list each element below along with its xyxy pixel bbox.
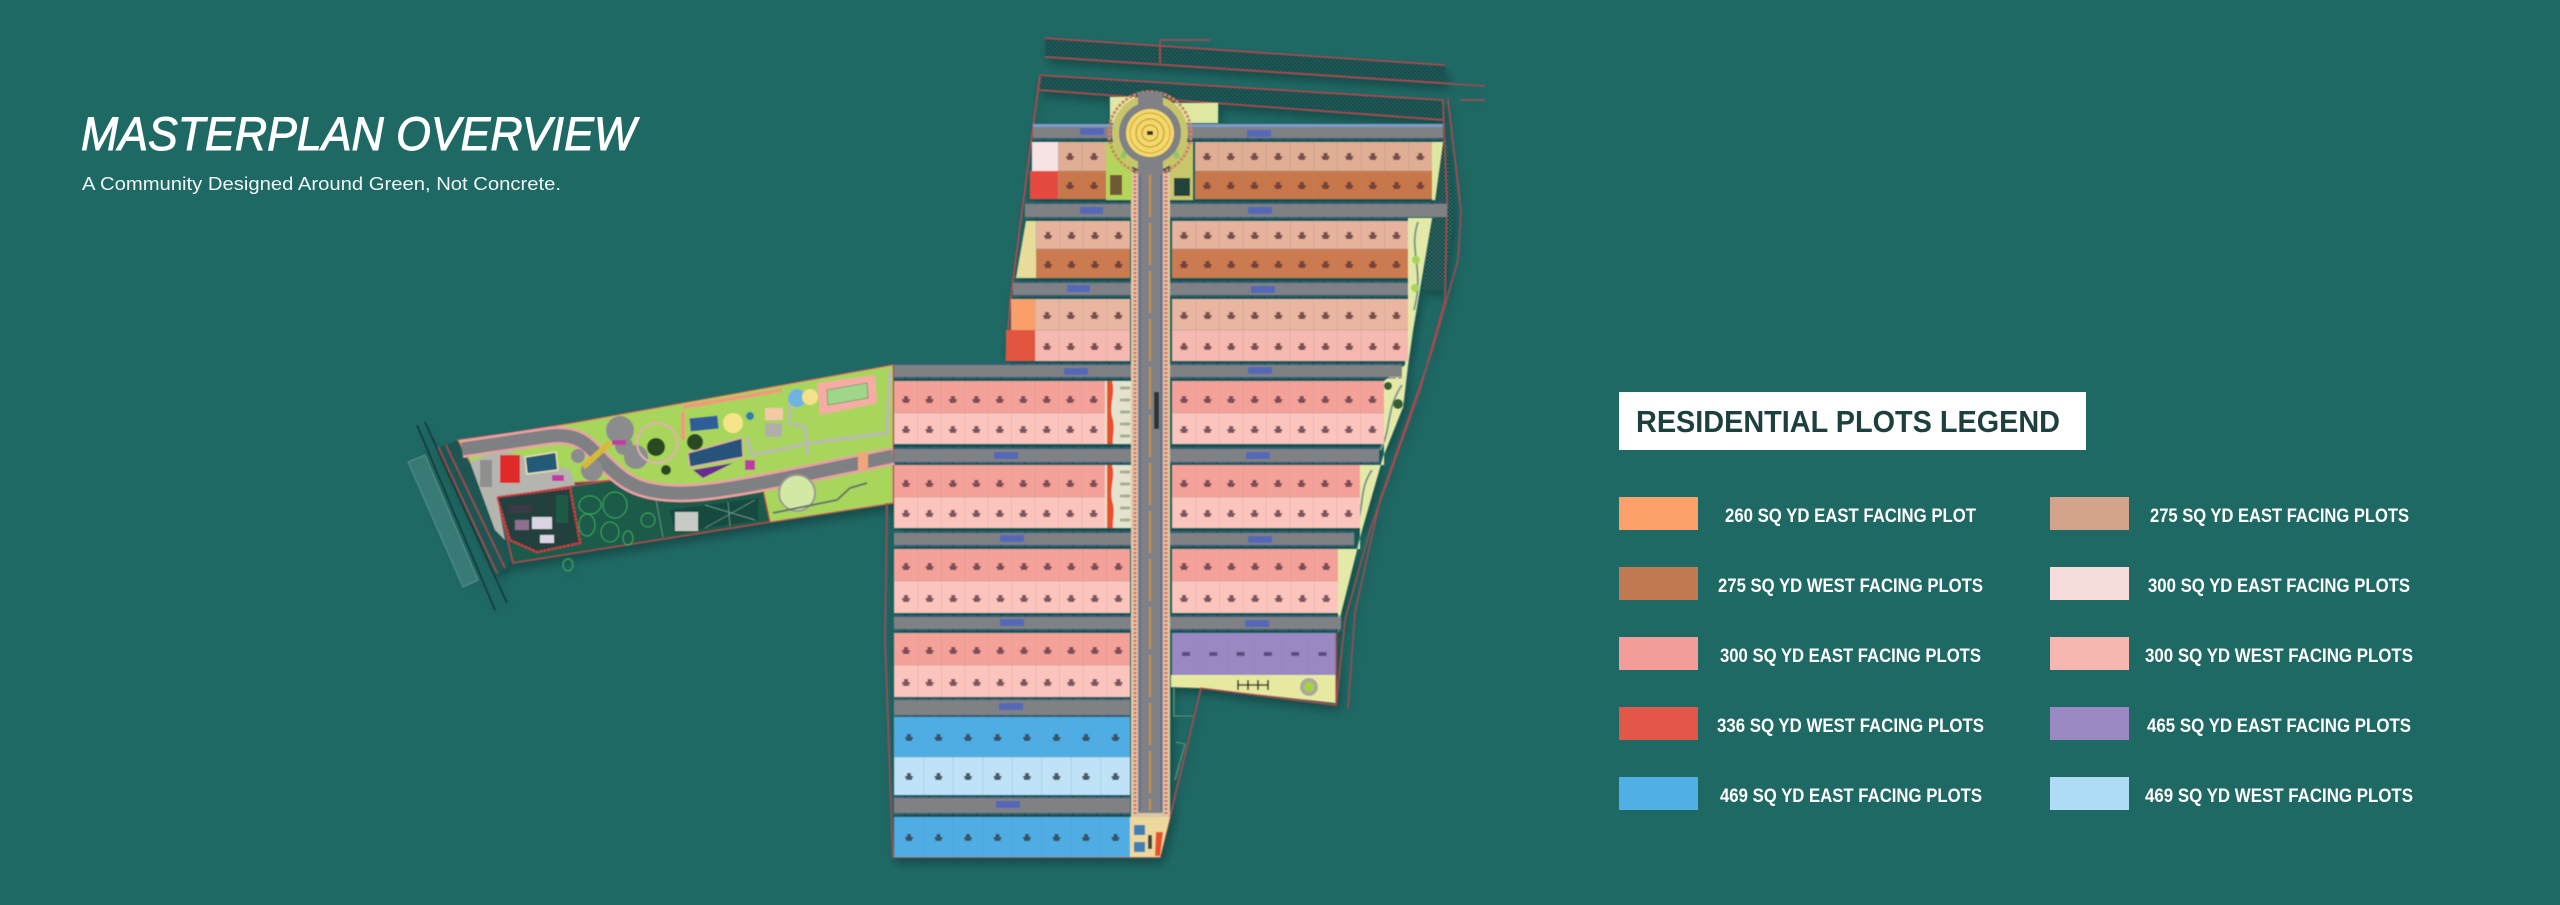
legend item 469 west [2050, 777, 2413, 810]
legend item 260 east [1619, 497, 1976, 530]
avenue blue edge lines [1140, 175, 1161, 810]
west wing faint canal strip [408, 455, 478, 587]
subtitle: A Community Designed Around Green, Not Concrete. [82, 174, 561, 194]
tennis inner [827, 383, 868, 405]
upper walkway [683, 390, 782, 440]
south east boundary [894, 633, 1336, 857]
legend item 300 east [1619, 637, 1981, 670]
legend heading: RESIDENTIAL PLOTS LEGEND [1636, 404, 2060, 439]
legend item 469 east [1619, 777, 1982, 810]
legend heading [1619, 392, 2086, 450]
grey shade blobs [571, 416, 648, 481]
central avenue verges [1131, 172, 1170, 817]
dark green nursery [497, 480, 770, 563]
legend item 300 west: 300 SQ YD WEST FACING PLOTS [2145, 646, 2413, 667]
club building detail [508, 495, 568, 543]
legend item 469 west: 469 SQ YD WEST FACING PLOTS [2145, 786, 2413, 807]
legend item 300 west [2050, 637, 2413, 670]
pink walk along road [462, 435, 893, 493]
plots row D [894, 381, 1384, 444]
title: MASTERPLAN OVERVIEW [81, 107, 640, 160]
blue service strip [1033, 124, 1443, 127]
garden trees [1384, 256, 1420, 409]
blue court [689, 416, 719, 431]
legend item 300 east pale [2050, 567, 2410, 600]
service yard cross lines [656, 500, 755, 537]
road edge lines [894, 139, 1447, 814]
yellow footbridge [583, 443, 610, 467]
trees [647, 434, 703, 475]
legend item 300 east: 300 SQ YD EAST FACING PLOTS [1720, 646, 1981, 667]
legend item 465 east [2050, 707, 2411, 740]
main curved road [462, 435, 893, 493]
plots row G [894, 633, 1336, 697]
plots row I [894, 817, 1130, 857]
avenue red edge ticks [1135, 172, 1166, 815]
legend item 465 east: 465 SQ YD EAST FACING PLOTS [2147, 716, 2411, 737]
service yard building [675, 512, 698, 531]
plots row E [894, 465, 1360, 528]
east landscape sliver [1432, 142, 1443, 200]
garden paths [1355, 222, 1418, 528]
masterplan drawing [408, 38, 1485, 858]
north west boundary [1006, 75, 1040, 361]
avenue notice board [1154, 392, 1159, 429]
legend item 300 east pale: 300 SQ YD EAST FACING PLOTS [2148, 576, 2410, 597]
grey forecourt [470, 450, 575, 540]
plots row F [894, 549, 1338, 613]
parking and red planting bays [1105, 381, 1131, 528]
central avenue road [1138, 92, 1163, 813]
legend item 275 east: 275 SQ YD EAST FACING PLOTS [2150, 506, 2409, 527]
road name tags [994, 128, 1275, 808]
circular garden [779, 475, 815, 511]
pocket pavilions [1110, 175, 1190, 196]
east boundary lines [1336, 98, 1461, 708]
tennis courts [817, 375, 877, 415]
wing green base [458, 365, 893, 522]
swimming pool rectangle [525, 452, 558, 474]
plots row H [894, 717, 1130, 795]
red block [500, 455, 520, 483]
south utility block [1130, 817, 1170, 857]
tree outline clusters [560, 492, 655, 571]
wing red boundary [438, 445, 505, 573]
grey service paths [747, 370, 890, 455]
legend item 275 west [1619, 567, 1983, 600]
entrance greens [1110, 97, 1135, 123]
legend item 275 east [2050, 497, 2409, 530]
roundabout plaza [1109, 92, 1191, 175]
south green outlines [1174, 688, 1193, 780]
west garden strip row B [1016, 221, 1036, 278]
purple planting [693, 463, 733, 478]
avenue median [1149, 175, 1151, 810]
internal roads [894, 127, 1447, 813]
winding path [773, 483, 867, 513]
green pocket east of avenue [1170, 142, 1193, 200]
green pocket west of avenue [1106, 142, 1132, 200]
legend item 260 east: 260 SQ YD EAST FACING PLOT [1725, 506, 1976, 527]
dark service yard [670, 498, 758, 533]
wing gate [858, 452, 868, 470]
top access roads hatched [1038, 38, 1485, 200]
water and sand circles [788, 389, 818, 407]
legend item 275 west: 275 SQ YD WEST FACING PLOTS [1718, 576, 1983, 597]
ring garden [637, 423, 677, 463]
west wing amenity zone [408, 365, 893, 610]
plots row B [1036, 221, 1408, 278]
entrance greens east [1165, 103, 1218, 123]
legend item 336 west: 336 SQ YD WEST FACING PLOTS [1717, 716, 1984, 737]
plots row C [1006, 299, 1408, 361]
east garden strip [1338, 218, 1432, 633]
pond [688, 438, 743, 467]
legend item 336 west [1619, 707, 1984, 740]
south west boundary wall [885, 503, 893, 858]
magenta spots [552, 440, 755, 481]
legend item 469 east: 469 SQ YD EAST FACING PLOTS [1720, 786, 1982, 807]
plots row A [1030, 142, 1432, 199]
south east cream parcel [1171, 675, 1336, 703]
west buffer strip [440, 440, 513, 573]
play and lawn blobs [723, 408, 783, 437]
west edge black lines [417, 422, 507, 610]
club building block [497, 488, 580, 552]
east buffer hatch [1423, 133, 1453, 290]
grey block [480, 460, 492, 487]
